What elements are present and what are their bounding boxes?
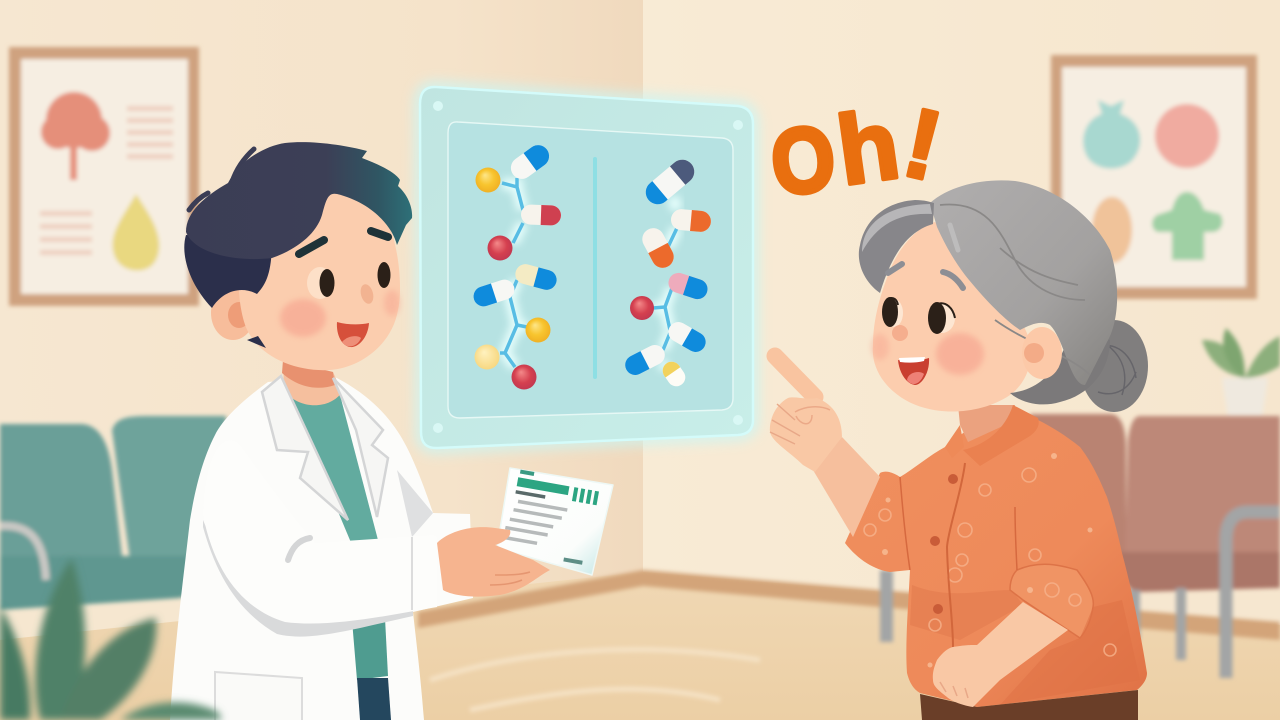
coat inner shadow xyxy=(397,470,433,537)
hair under back xyxy=(1010,330,1110,404)
head xyxy=(238,192,400,370)
resting hand and arm xyxy=(933,602,1068,707)
pointing finger xyxy=(775,356,815,397)
capsule: blue white bottom xyxy=(622,342,668,378)
main gray hair xyxy=(930,180,1117,385)
potted plant on the right xyxy=(1202,328,1280,418)
exclamation text: Oh!: O xyxy=(767,107,840,215)
blouse darker band xyxy=(910,585,1023,640)
foreground plant xyxy=(0,558,222,720)
capsule: red white xyxy=(521,204,561,226)
coat body xyxy=(170,376,473,720)
panel divider xyxy=(593,157,597,379)
poster icon: fruit xyxy=(1083,100,1140,168)
eyes xyxy=(885,299,903,327)
pointing hand xyxy=(770,397,842,472)
left molecule chain xyxy=(471,141,561,390)
ear xyxy=(211,286,255,340)
pharmacist character xyxy=(170,142,613,720)
blouse placket xyxy=(947,463,965,647)
blouse buttons xyxy=(930,474,958,614)
poster icon: tree xyxy=(41,92,110,180)
blouse sleeve shade xyxy=(1010,564,1093,638)
nose xyxy=(892,325,908,341)
ear xyxy=(1022,327,1062,379)
hair tufts xyxy=(189,149,254,210)
cheeks xyxy=(936,333,984,375)
holding hand xyxy=(437,527,550,597)
right molecule chain xyxy=(622,155,712,390)
poster icon: peach drop xyxy=(1092,197,1132,263)
eyes xyxy=(307,267,333,299)
floating holographic panel xyxy=(420,87,753,448)
capsule: white orange vertical xyxy=(638,224,678,272)
capsule: white blue xyxy=(665,318,709,356)
hair main xyxy=(186,142,412,259)
pointing arm xyxy=(813,437,880,537)
capsule: yellow white small xyxy=(659,358,689,390)
coat sleeve xyxy=(203,440,437,624)
coat pocket xyxy=(215,672,302,720)
head xyxy=(873,222,1031,412)
card content xyxy=(498,468,600,565)
capsule: cream blue xyxy=(513,262,559,292)
poster icon: pink circle xyxy=(1155,104,1219,168)
blouse texture xyxy=(864,468,1116,656)
capsule: navy white blue xyxy=(641,155,699,209)
patient character xyxy=(770,180,1148,720)
hair back layer xyxy=(184,235,272,308)
orange blouse xyxy=(845,420,1147,707)
cheeks xyxy=(280,299,326,337)
capsule: blue white upper xyxy=(507,141,553,183)
capsule: pink blue xyxy=(666,270,710,302)
exclamation text: Oh!: ! xyxy=(895,87,951,201)
brown waiting chairs xyxy=(880,414,1280,678)
poster icon: green figure xyxy=(1152,192,1222,260)
front left hair lock xyxy=(859,200,934,293)
teal waiting chairs xyxy=(0,416,226,610)
capsule: white orange xyxy=(670,208,712,233)
hair highlight xyxy=(950,225,958,250)
medication card xyxy=(497,468,613,575)
panel corner lights xyxy=(433,101,743,433)
blouse collar xyxy=(963,405,1039,466)
teal shirt xyxy=(285,385,378,545)
neck xyxy=(283,360,342,405)
mouth xyxy=(337,322,369,347)
neck xyxy=(958,405,1016,442)
exclamation text: Oh!: h xyxy=(831,88,905,206)
right wall poster xyxy=(1051,55,1257,299)
capsule: blue white lower xyxy=(471,277,517,309)
small hair at jaw xyxy=(247,336,266,348)
left wall poster xyxy=(9,47,199,306)
mouth xyxy=(898,358,929,385)
dark trousers xyxy=(357,678,391,720)
nose xyxy=(359,283,375,305)
trousers xyxy=(920,690,1138,720)
eyebrows xyxy=(888,264,902,273)
poster icon: leaf xyxy=(113,194,159,270)
exclamation text: Oh! xyxy=(767,87,951,215)
coat lapels xyxy=(262,376,348,520)
hair bun xyxy=(1080,320,1148,412)
eyebrows xyxy=(299,240,324,254)
hair strands xyxy=(940,204,1090,375)
sleeve shadow xyxy=(203,520,413,637)
